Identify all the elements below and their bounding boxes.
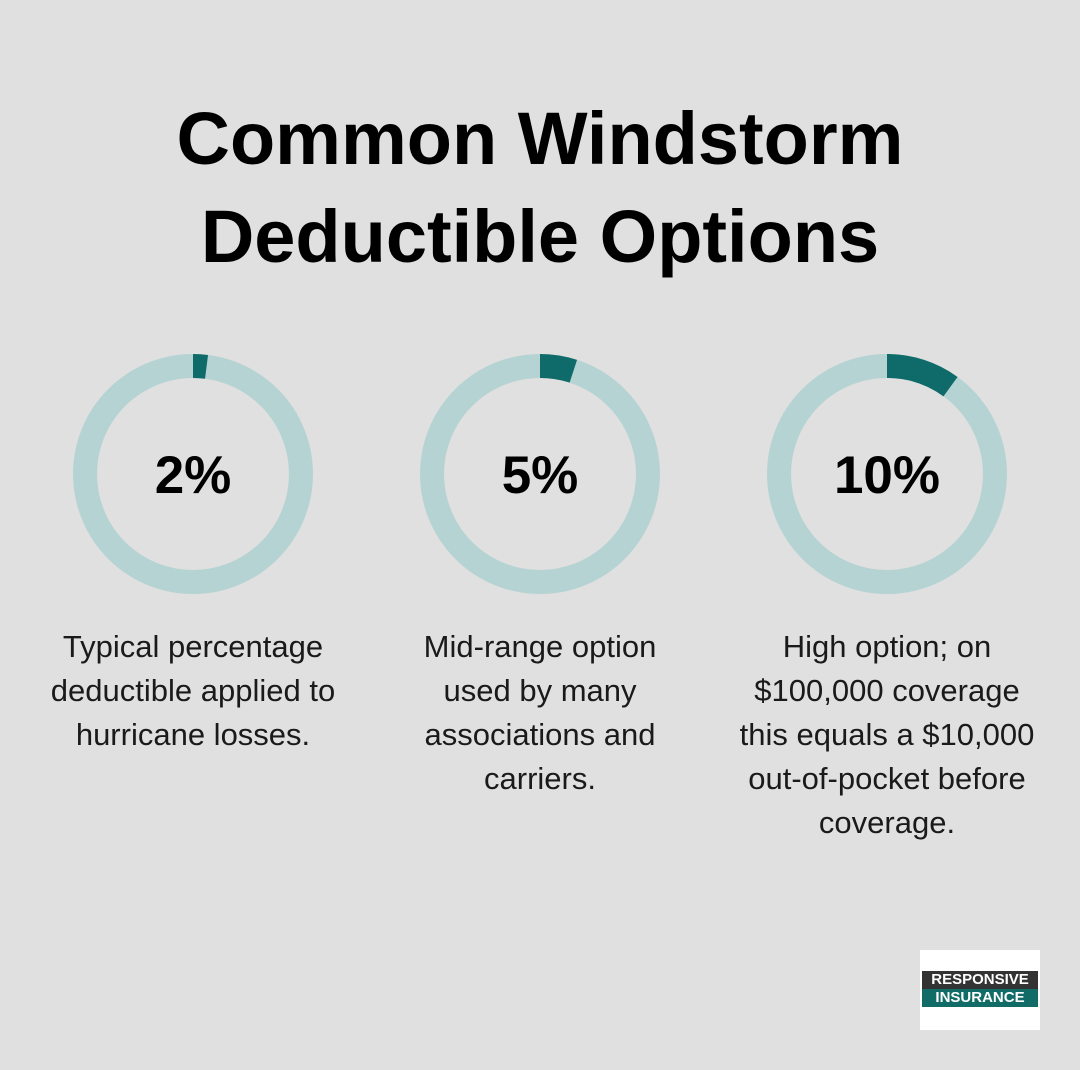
text: 10% description: High option; on	[783, 629, 991, 664]
donut: 5%: 5%	[502, 446, 578, 505]
text: 2% description: Typical percentage	[63, 629, 323, 664]
donut: 5%	[432, 366, 648, 582]
text: 10% description: coverage.	[819, 805, 955, 840]
text: 2% description	[51, 629, 335, 752]
donut: 10%: 10%	[834, 446, 940, 505]
logo: RESPONSIVE	[931, 971, 1029, 988]
logo: INSURANCE	[935, 989, 1025, 1006]
text: 5% description: Mid-range option	[424, 629, 656, 664]
donut: 2%	[85, 366, 301, 582]
text: 10% description: $100,000 coverage	[754, 673, 1020, 708]
text: 2% description: deductible applied to	[51, 673, 335, 708]
text: 5% description: carriers.	[484, 761, 596, 796]
text: 10% description	[740, 629, 1034, 840]
text: 5% description: used by many	[444, 673, 636, 708]
donut charts	[73, 354, 1007, 594]
text: 10% description: out-of-pocket before	[748, 761, 1026, 796]
title: Deductible Options	[201, 195, 879, 278]
text: 5% description	[424, 629, 656, 796]
text: 5% description: associations and	[425, 717, 655, 752]
text: 2% description: hurricane losses.	[76, 717, 310, 752]
donut: 2%: 2%	[155, 446, 231, 505]
donut: 10%	[779, 366, 995, 582]
title	[177, 97, 903, 278]
logo	[920, 950, 1040, 1030]
title: Common Windstorm	[177, 97, 903, 180]
text: 10% description: this equals a $10,000	[740, 717, 1034, 752]
